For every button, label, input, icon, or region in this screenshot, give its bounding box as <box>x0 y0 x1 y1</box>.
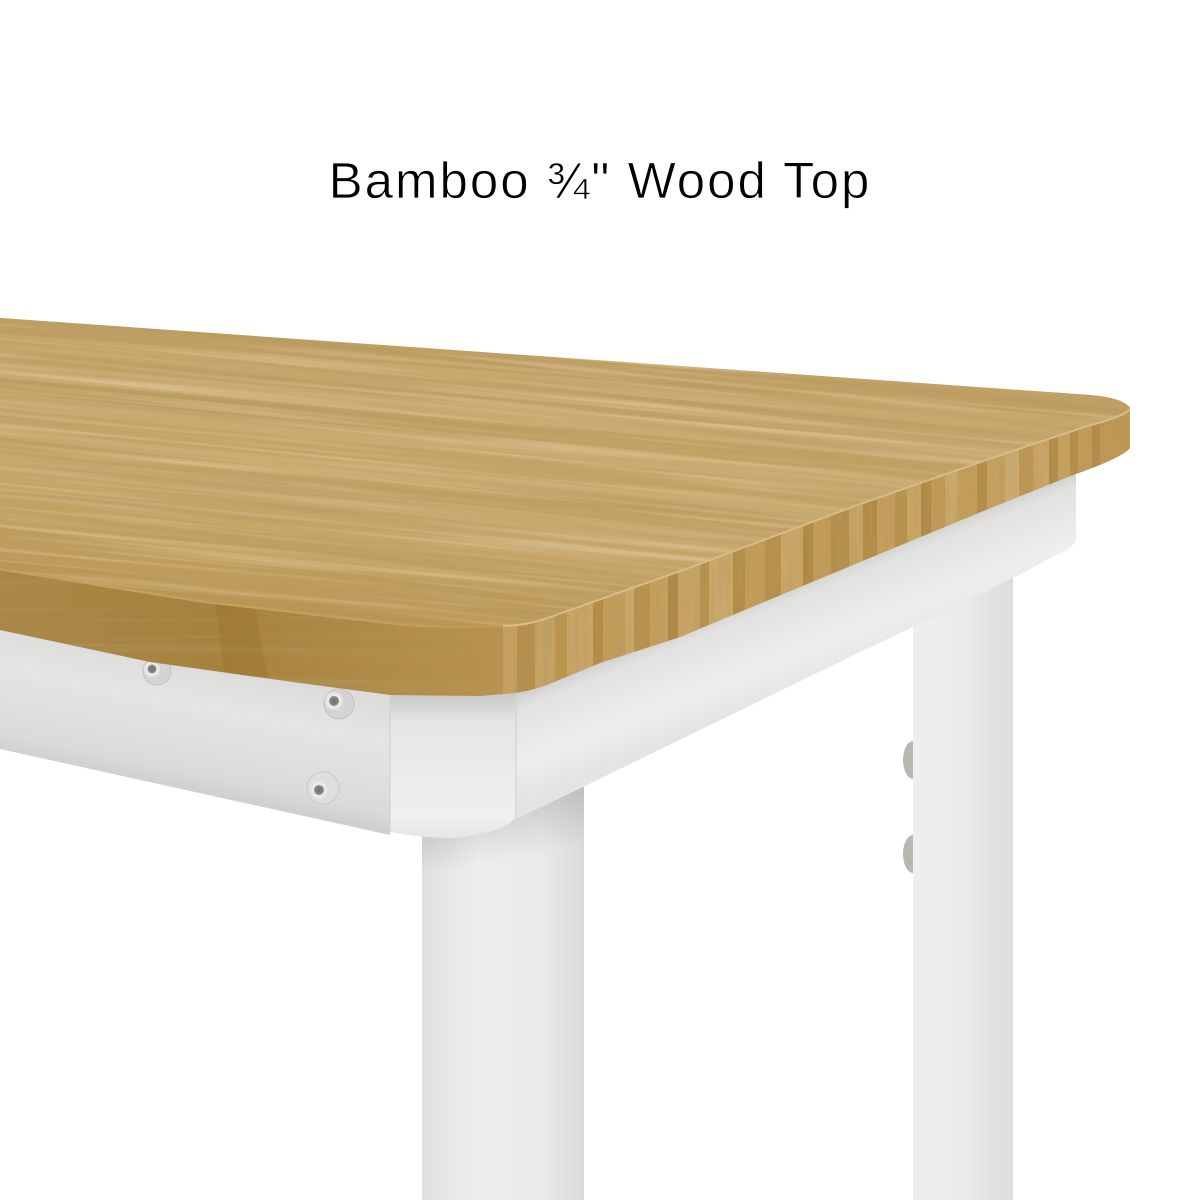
right apron <box>503 465 1076 819</box>
screws <box>143 657 354 804</box>
corner bracket <box>390 690 516 838</box>
illustration: desk corner <box>0 318 1130 1200</box>
bamboo left edge <box>0 560 510 700</box>
title: Bamboo ¾" Wood Top <box>329 152 871 209</box>
bamboo right edge <box>500 400 1135 700</box>
plank strips <box>0 318 1130 625</box>
vertical strips <box>503 400 1130 700</box>
grain <box>0 326 1088 598</box>
bamboo top surface <box>0 318 1130 626</box>
front left leg <box>422 780 584 1200</box>
back right leg <box>903 560 1013 1200</box>
left apron <box>0 620 390 835</box>
adjustment knobs <box>903 741 923 873</box>
